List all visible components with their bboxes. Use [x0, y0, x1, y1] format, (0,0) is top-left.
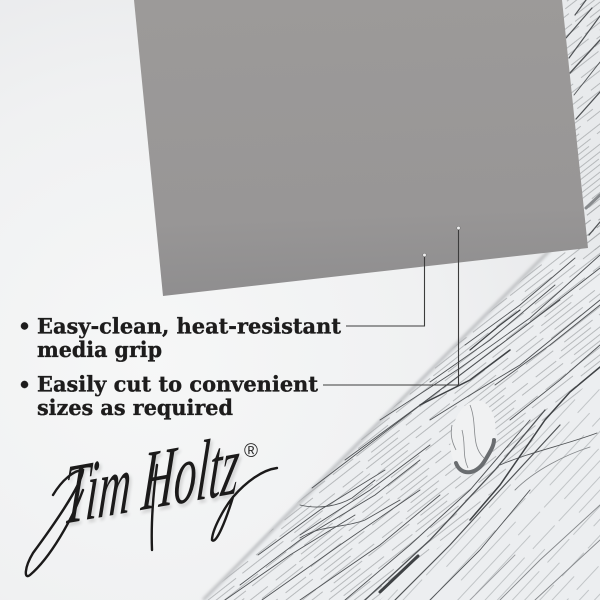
registered mark: ® [244, 441, 258, 462]
bullet list: product features [21, 314, 341, 420]
brand signature: Tim Holtz [26, 417, 277, 576]
bullet 1 [21, 314, 341, 362]
signature wordmark: Tim Holtz [61, 417, 243, 543]
grey media grip sheet [134, 0, 588, 296]
bullet 1: Easy-clean, heat-resistant [37, 314, 341, 338]
signature flourishes [26, 465, 277, 576]
signature shadow: Tim Holtz [63, 420, 245, 546]
bullet 2 [21, 372, 318, 420]
bullet 2: Easily cut to convenient [37, 372, 318, 396]
callout leader: media grip [346, 253, 426, 326]
bullet 1: media grip [37, 337, 162, 362]
background: wood planks [203, 0, 600, 600]
callout leader: cut to size [323, 226, 460, 385]
bullet 2: sizes as required [37, 395, 233, 420]
wood knot [445, 397, 501, 477]
